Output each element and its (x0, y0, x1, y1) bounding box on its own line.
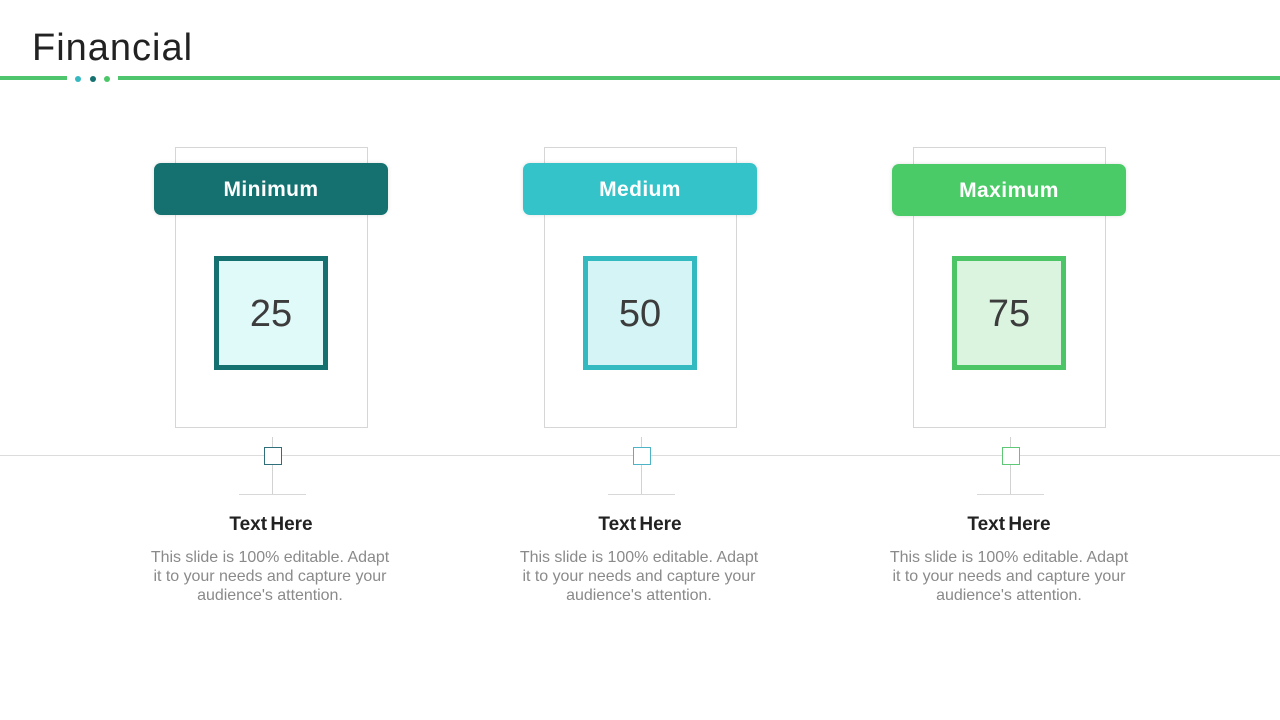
title: Financial (32, 27, 193, 69)
card outline (175, 147, 368, 428)
medium label (523, 163, 757, 215)
description: This slide is 100% editable. Adapt (151, 549, 389, 566)
description (890, 549, 1128, 604)
description: it to your needs and capture your (154, 568, 386, 585)
description: audience's attention. (566, 587, 712, 604)
heading: Text Here (967, 514, 1051, 535)
value 25 (214, 256, 328, 370)
description: it to your needs and capture your (523, 568, 755, 585)
description: This slide is 100% editable. Adapt (890, 549, 1128, 566)
horizontal timeline (0, 455, 1280, 456)
description: audience's attention. (197, 587, 343, 604)
description (151, 549, 390, 604)
description: it to your needs and capture your (893, 568, 1125, 585)
minimum label: Minimum (224, 178, 318, 201)
value 75: 75 (988, 293, 1030, 335)
panel: medium (520, 147, 758, 604)
value 50: 50 (619, 293, 661, 335)
panel: maximum (890, 147, 1128, 604)
medium label: Medium (599, 178, 681, 201)
card outline (544, 147, 737, 428)
connector and marker (977, 437, 1044, 495)
description: audience's attention. (936, 587, 1082, 604)
heading: Text Here (598, 514, 682, 535)
card outline (913, 147, 1106, 428)
maximum label: Maximum (959, 179, 1059, 202)
value 25: 25 (250, 293, 292, 335)
description (520, 549, 758, 604)
value 50 (583, 256, 697, 370)
maximum label (892, 164, 1126, 216)
minimum label (154, 163, 388, 215)
title rule with dots (0, 76, 1280, 82)
connector and marker (608, 437, 675, 495)
description: This slide is 100% editable. Adapt (520, 549, 758, 566)
connector and marker (239, 437, 306, 495)
panel: minimum (151, 147, 390, 604)
value 75 (952, 256, 1066, 370)
heading: Text Here (229, 514, 313, 535)
